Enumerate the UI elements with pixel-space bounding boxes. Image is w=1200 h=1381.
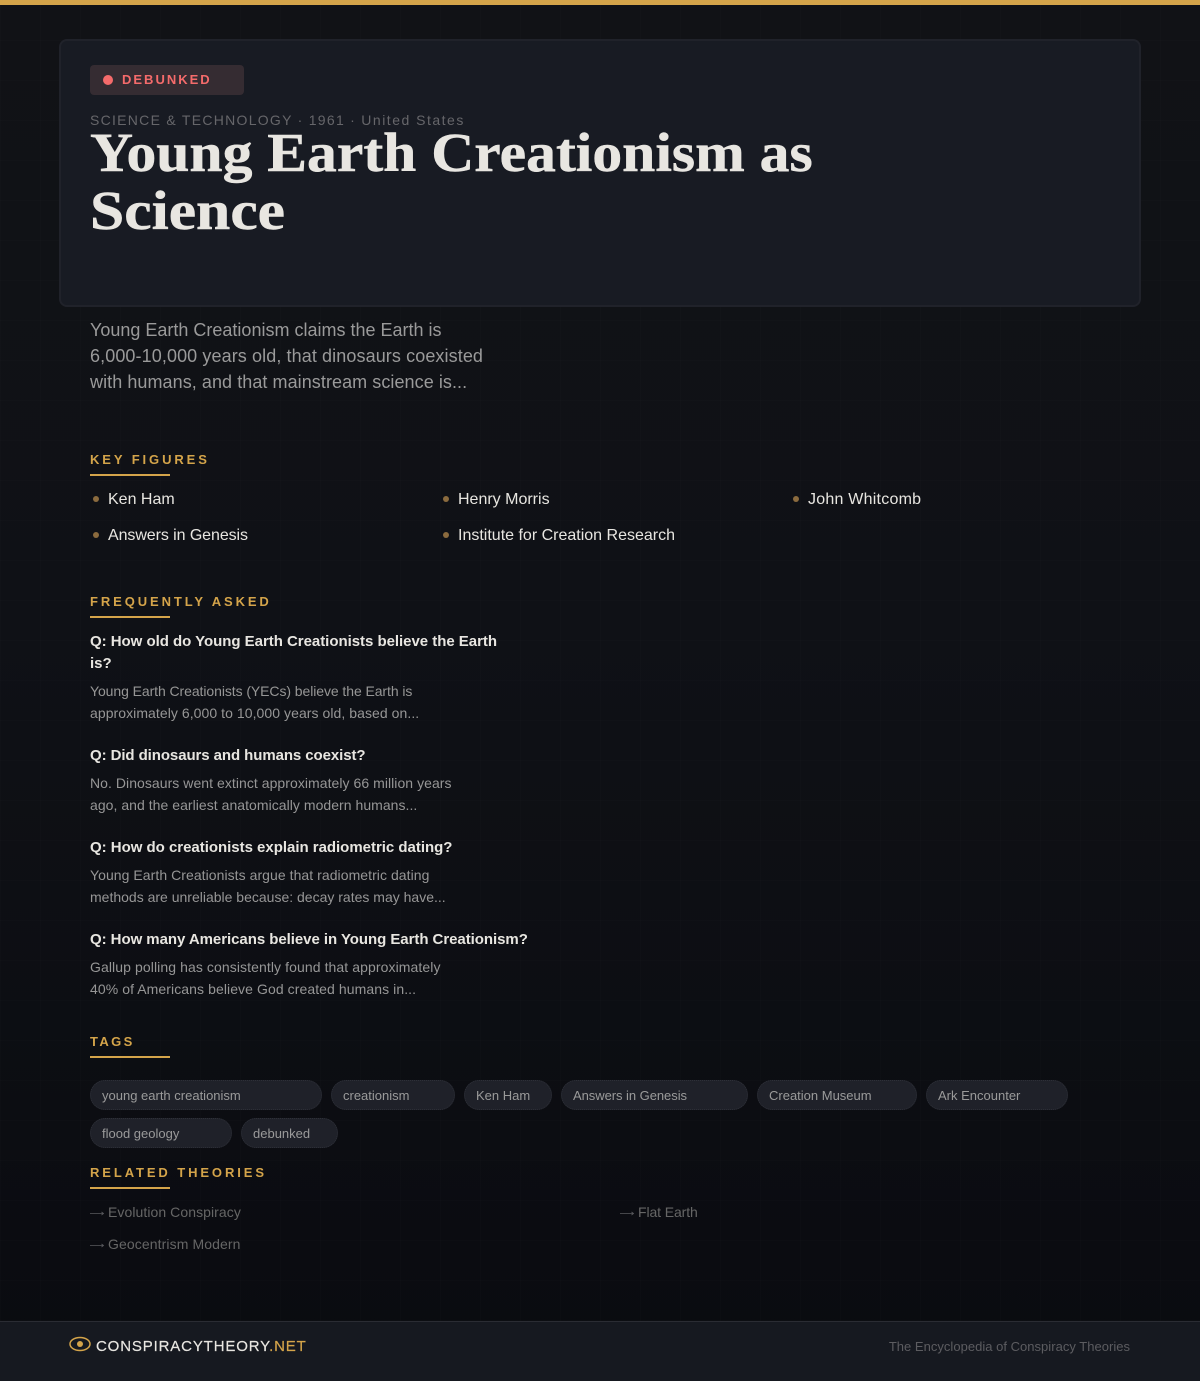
tag: Ken Ham xyxy=(476,1088,530,1103)
related link: Flat Earth: Flat Earth xyxy=(638,1204,698,1220)
panel: hero header xyxy=(59,39,1141,307)
tag: young earth creationism xyxy=(102,1088,241,1103)
faq 4 answer xyxy=(90,959,441,997)
title: Science xyxy=(90,180,285,241)
related link: Geocentrism Modern: Geocentrism Modern xyxy=(108,1236,241,1252)
footer bar xyxy=(0,1321,1200,1381)
summary text: 6,000-10,000 years old, that dinosaurs coexisted xyxy=(90,346,483,366)
faq 2 answer: No. Dinosaurs went extinct approximately 66 million years xyxy=(90,775,452,791)
tag: debunked xyxy=(253,1126,310,1141)
faq 2 answer: ago, and the earliest anatomically modern humans... xyxy=(90,797,417,813)
tag xyxy=(90,1118,232,1148)
tag xyxy=(90,1080,322,1110)
faq 3 answer xyxy=(90,867,446,905)
title: Young Earth Creationism as xyxy=(90,122,813,183)
heading: key figures: KEY FIGURES xyxy=(90,452,210,467)
figure: Answers in Genesis: Answers in Genesis xyxy=(108,527,248,544)
faq 3 answer: Young Earth Creationists argue that radiometric dating xyxy=(90,867,429,883)
related link: Evolution Conspiracy: Evolution Conspiracy xyxy=(108,1204,241,1220)
faq 1 question: Q: How old do Young Earth Creationists believe the Earth xyxy=(90,633,497,650)
tag xyxy=(464,1080,552,1110)
tag: flood geology xyxy=(102,1126,179,1141)
faq 4 question: Q: How many Americans believe in Young Earth Creationism? xyxy=(90,931,528,948)
faq 4 answer: Gallup polling has consistently found that approximately xyxy=(90,959,441,975)
tag: Creation Museum xyxy=(769,1088,872,1103)
faq 3 answer: methods are unreliable because: decay rates may have... xyxy=(90,889,446,905)
figure: John Whitcomb: John Whitcomb xyxy=(808,491,921,508)
figure: Institute for Creation Research: Institute for Creation Research xyxy=(458,527,675,544)
category meta line: SCIENCE & TECHNOLOGY · 1961 · United States xyxy=(90,112,465,128)
heading: frequently asked: FREQUENTLY ASKED xyxy=(90,594,272,609)
tag xyxy=(757,1080,917,1110)
figure: Henry Morris: Henry Morris xyxy=(458,491,550,508)
top accent bar xyxy=(0,0,1200,5)
faq 1 question xyxy=(90,633,497,672)
faq 4 answer: 40% of Americans believe God created humans in... xyxy=(90,981,416,997)
faq 1 question: is? xyxy=(90,655,112,672)
icon: eye logo xyxy=(69,1336,91,1352)
badge dot xyxy=(103,75,113,85)
tag: creationism xyxy=(343,1088,409,1103)
tag: Answers in Genesis xyxy=(573,1088,687,1103)
faq 2 answer xyxy=(90,775,452,813)
summary text: Young Earth Creationism claims the Earth is xyxy=(90,320,442,340)
faq 1 answer: Young Earth Creationists (YECs) believe the Earth is xyxy=(90,683,412,699)
footer brand: CONSPIRACYTHEORY.NET xyxy=(96,1338,307,1355)
faq 1 answer xyxy=(90,683,419,721)
tag xyxy=(926,1080,1068,1110)
title xyxy=(90,122,813,241)
footer tagline: The Encyclopedia of Conspiracy Theories xyxy=(889,1339,1130,1354)
badge label: DEBUNKED xyxy=(122,72,212,87)
faq 2 question: Q: Did dinosaurs and humans coexist? xyxy=(90,747,366,764)
tag list xyxy=(90,1080,1068,1148)
summary text: with humans, and that mainstream science is... xyxy=(90,372,467,392)
tag xyxy=(331,1080,455,1110)
tag xyxy=(241,1118,338,1148)
tag xyxy=(561,1080,748,1110)
status badge xyxy=(90,65,244,95)
heading: tags: TAGS xyxy=(90,1034,135,1049)
tag: Ark Encounter xyxy=(938,1088,1020,1103)
faq 3 question: Q: How do creationists explain radiometric dating? xyxy=(90,839,452,856)
heading: related theories: RELATED THEORIES xyxy=(90,1165,267,1180)
summary text xyxy=(90,320,483,392)
faq 1 answer: approximately 6,000 to 10,000 years old, based on... xyxy=(90,705,419,721)
key figures list xyxy=(93,491,921,544)
figure: Ken Ham: Ken Ham xyxy=(108,491,175,508)
